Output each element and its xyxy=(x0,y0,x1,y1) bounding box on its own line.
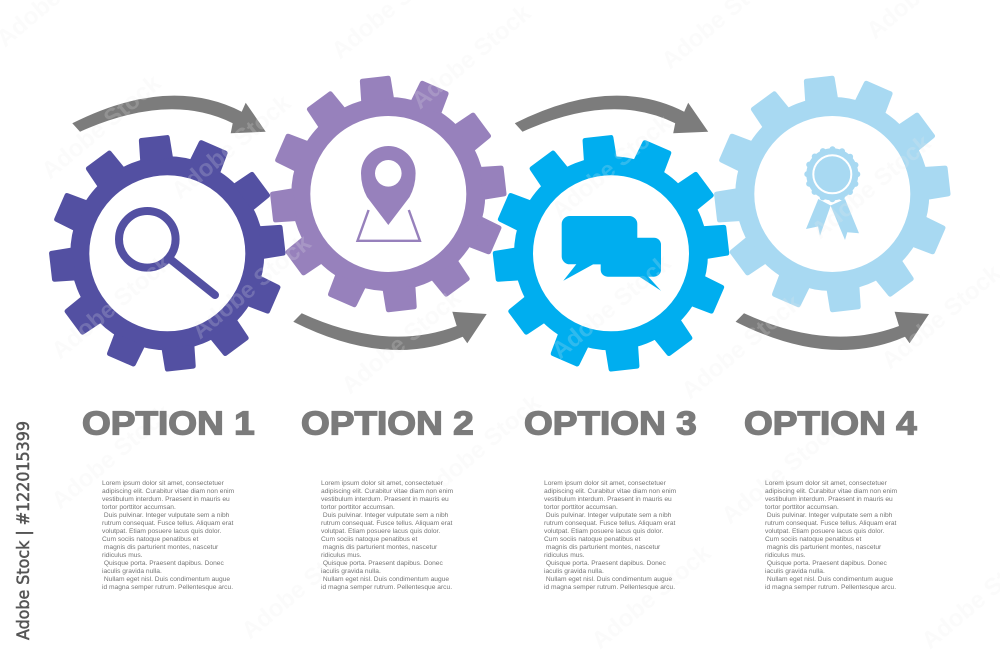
watermark: faint repeated stock text: Adobe Stock xyxy=(337,284,467,400)
icon: speech bubbles xyxy=(562,216,661,291)
watermark: faint repeated stock text: Adobe Stock xyxy=(547,109,677,225)
watermark: faint repeated stock text: Adobe Stock xyxy=(187,229,317,345)
arrow: option 2 to option 3 xyxy=(293,312,487,350)
side credit: stock id: Adobe Stock | #122015399 xyxy=(14,421,34,640)
heading: option 1: OPTION 1 xyxy=(82,405,255,442)
gear: option 2 purple xyxy=(270,75,507,313)
icon: map pin xyxy=(358,146,420,241)
arrow: option 1 to option 2 xyxy=(72,96,266,133)
gear: option 4 light blue xyxy=(714,75,951,313)
watermark: faint repeated stock text: Adobe Stock xyxy=(717,414,847,530)
arrow: option 3 to option 4 xyxy=(515,96,708,133)
watermark: faint repeated stock text: Adobe Stock xyxy=(417,389,547,505)
heading: option 3: OPTION 3 xyxy=(524,405,697,442)
watermark: faint repeated stock text: Adobe Stock xyxy=(47,399,177,515)
watermark: faint repeated stock text: Adobe Stock xyxy=(407,0,537,115)
watermark: faint repeated stock text: Adobe Stock xyxy=(47,249,177,365)
watermark: faint repeated stock text: Adobe Stock xyxy=(547,249,677,365)
gear: option 3 cyan xyxy=(492,135,730,372)
watermark: faint repeated stock text: Adobe Stock xyxy=(587,539,717,655)
heading: option 2: OPTION 2 xyxy=(301,405,474,442)
text block: option 3: Lorem ipsum dolor sit amet, consectetuer adipiscing elit. Curabitur vitae diam non enim vestibulum interdum. Praesent in mauris eu tortor porttitor accumsan. Duis pulvinar. Integer vulputate sem a nibh rutrum consequat. Fusce tellus. Aliquam erat volutpat. Etiam posuere lacus quis dolor. Cum sociis natoque penatibus et magnis dis parturient montes, nascetur ridiculus mus. Quisque porta. Praesent dapibus. Donec iaculis gravida nulla. Nullam eget nisl. Duis condimentum augue id magna semper rutrum. Pellentesque arcu. xyxy=(544,480,676,591)
watermark: faint repeated stock text: Adobe Stock xyxy=(677,289,807,405)
icon: magnifying glass xyxy=(119,211,215,295)
watermark: faint repeated stock text: Adobe Stock xyxy=(807,129,937,245)
text block: option 1: Lorem ipsum dolor sit amet, consectetuer adipiscing elit. Curabitur vitae diam non enim vestibulum interdum. Praesent in mauris eu tortor porttitor accumsan. Duis pulvinar. Integer vulputate sem a nibh rutrum consequat. Fusce tellus. Aliquam erat volutpat. Etiam posuere lacus quis dolor. Cum sociis natoque penatibus et magnis dis parturient montes, nascetur ridiculus mus. Quisque porta. Praesent dapibus. Donec iaculis gravida nulla. Nullam eget nisl. Duis condimentum augue id magna semper rutrum. Pellentesque arcu. xyxy=(102,480,234,591)
icon: award ribbon badge xyxy=(806,148,859,240)
heading: option 4: OPTION 4 xyxy=(744,405,917,442)
text block: option 2: Lorem ipsum dolor sit amet, consectetuer adipiscing elit. Curabitur vitae diam non enim vestibulum interdum. Praesent in mauris eu tortor porttitor accumsan. Duis pulvinar. Integer vulputate sem a nibh rutrum consequat. Fusce tellus. Aliquam erat volutpat. Etiam posuere lacus quis dolor. Cum sociis natoque penatibus et magnis dis parturient montes, nascetur ridiculus mus. Quisque porta. Praesent dapibus. Donec iaculis gravida nulla. Nullam eget nisl. Duis condimentum augue id magna semper rutrum. Pellentesque arcu. xyxy=(321,480,453,591)
arrow: after option 4 xyxy=(736,312,929,350)
watermark: faint repeated stock text: Adobe Stock xyxy=(237,529,367,645)
watermark: faint repeated stock text: Adobe Stock xyxy=(37,69,167,185)
watermark: faint repeated stock text: Adobe Stock xyxy=(167,89,297,205)
text block: option 4: Lorem ipsum dolor sit amet, consectetuer adipiscing elit. Curabitur vitae diam non enim vestibulum interdum. Praesent in mauris eu tortor porttitor accumsan. Duis pulvinar. Integer vulputate sem a nibh rutrum consequat. Fusce tellus. Aliquam erat volutpat. Etiam posuere lacus quis dolor. Cum sociis natoque penatibus et magnis dis parturient montes, nascetur ridiculus mus. Quisque porta. Praesent dapibus. Donec iaculis gravida nulla. Nullam eget nisl. Duis condimentum augue id magna semper rutrum. Pellentesque arcu. xyxy=(765,480,897,591)
gear: option 1 indigo xyxy=(49,135,286,372)
